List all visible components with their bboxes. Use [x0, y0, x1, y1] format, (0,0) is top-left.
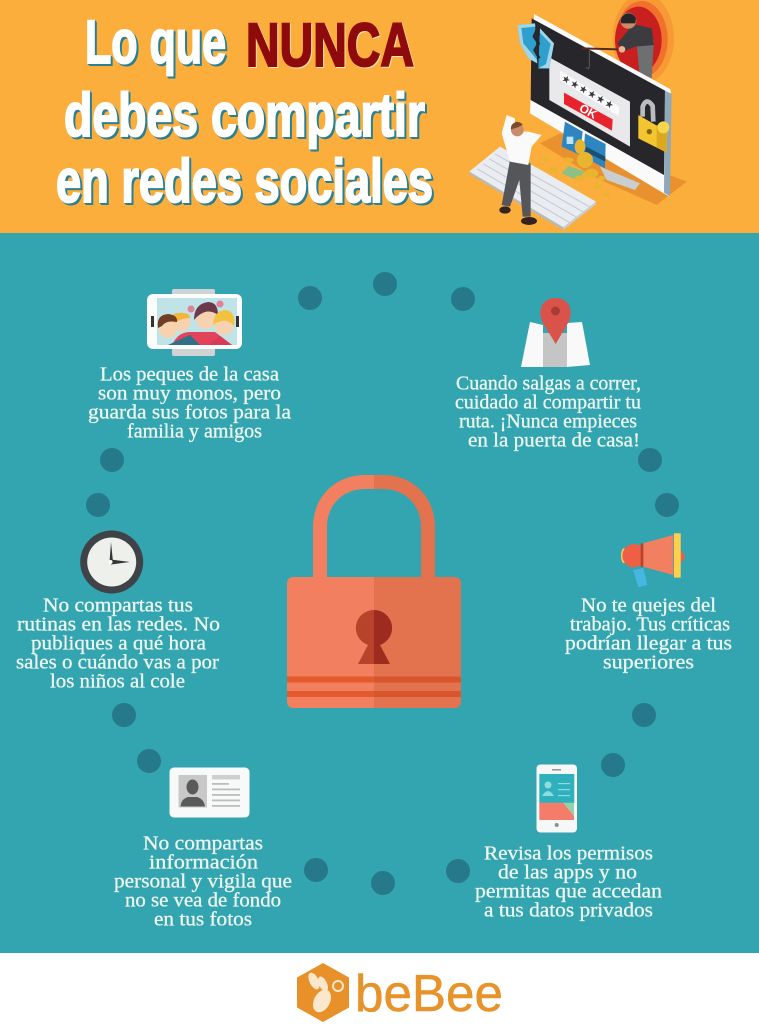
logo: beBee: beBee: [355, 965, 503, 1023]
text: work complaints: [565, 596, 732, 674]
monitor: [530, 14, 672, 197]
text: personal information: información: [149, 852, 258, 874]
text: running route: cuidado al compartir tu: [455, 392, 641, 414]
thief portal: [613, 0, 674, 83]
title: en redes sociales: [56, 147, 433, 215]
keyboard: [469, 147, 596, 230]
text: routines: sales o cuándo vas a por: [16, 652, 220, 674]
text: routines: No compartas tus: [43, 596, 193, 616]
text: running route: en la puerta de casa!: [468, 430, 640, 452]
title: NUNCA: [246, 11, 414, 79]
text: personal information: personal y vigila que: [114, 872, 292, 892]
text: routines: los niños al cole: [50, 672, 185, 692]
text: personal information: [114, 834, 292, 930]
icon: map pin: [521, 298, 590, 367]
text: work complaints: superiores: [603, 652, 694, 674]
text: app permissions: de las apps y no: [498, 862, 637, 884]
text: routines: publiques a qué hora: [31, 634, 206, 654]
text: personal information: en tus fotos: [154, 910, 252, 930]
monitor: OK: [577, 101, 600, 122]
text: family photos: familia y amigos: [127, 422, 262, 442]
text: family photos: guarda sus fotos para la: [88, 402, 291, 424]
monitor shadow: [540, 133, 687, 205]
text: personal information: No compartas: [143, 834, 263, 854]
title: debes compartir: [64, 81, 425, 149]
monitor stand: [600, 167, 640, 190]
icon: smartphone apps: [536, 764, 577, 832]
text: running route: [455, 374, 641, 452]
cracked shield: [517, 23, 554, 68]
text: family photos: [88, 364, 291, 442]
text: app permissions: Revisa los permisos: [484, 844, 653, 864]
text: app permissions: [475, 844, 662, 922]
text: family photos: son muy monos, pero: [98, 384, 281, 404]
icon: family selfie on phone: [147, 289, 242, 356]
text: running route: Cuando salgas a correr,: [456, 374, 641, 394]
text: routines: [16, 596, 220, 692]
text: app permissions: permitas que accedan: [475, 882, 662, 902]
text: routines: rutinas en las redes. No: [17, 614, 220, 636]
central padlock: [287, 475, 461, 708]
monitor: ★★★★★★: [559, 73, 616, 112]
title: [56, 8, 433, 215]
text: work complaints: podrían llegar a tus: [565, 634, 732, 654]
gold coins and banknote: [542, 139, 610, 197]
broken credit card: [562, 122, 606, 168]
illustration: hacked computer: [469, 0, 687, 230]
teal main panel: [0, 233, 759, 953]
logo: beBee: [297, 963, 503, 1023]
title: Lo que: [85, 8, 226, 76]
icon: ID card: [170, 768, 250, 818]
text: app permissions: a tus datos privados: [484, 900, 653, 922]
thief: [617, 13, 654, 78]
yellow padlock: [638, 101, 669, 153]
worried man: [499, 115, 542, 225]
text: running route: ruta. ¡Nunca empieces: [459, 412, 637, 432]
decorative dots ring: [86, 272, 679, 895]
text: work complaints: No te quejes del: [581, 596, 717, 616]
icon: megaphone: [621, 533, 685, 587]
text: work complaints: trabajo. Tus críticas: [570, 614, 730, 636]
header band: [0, 0, 759, 233]
text: family photos: Los peques de la casa: [100, 364, 279, 386]
text: personal information: no se vea de fondo: [125, 890, 281, 912]
icon: clock: [80, 530, 143, 594]
